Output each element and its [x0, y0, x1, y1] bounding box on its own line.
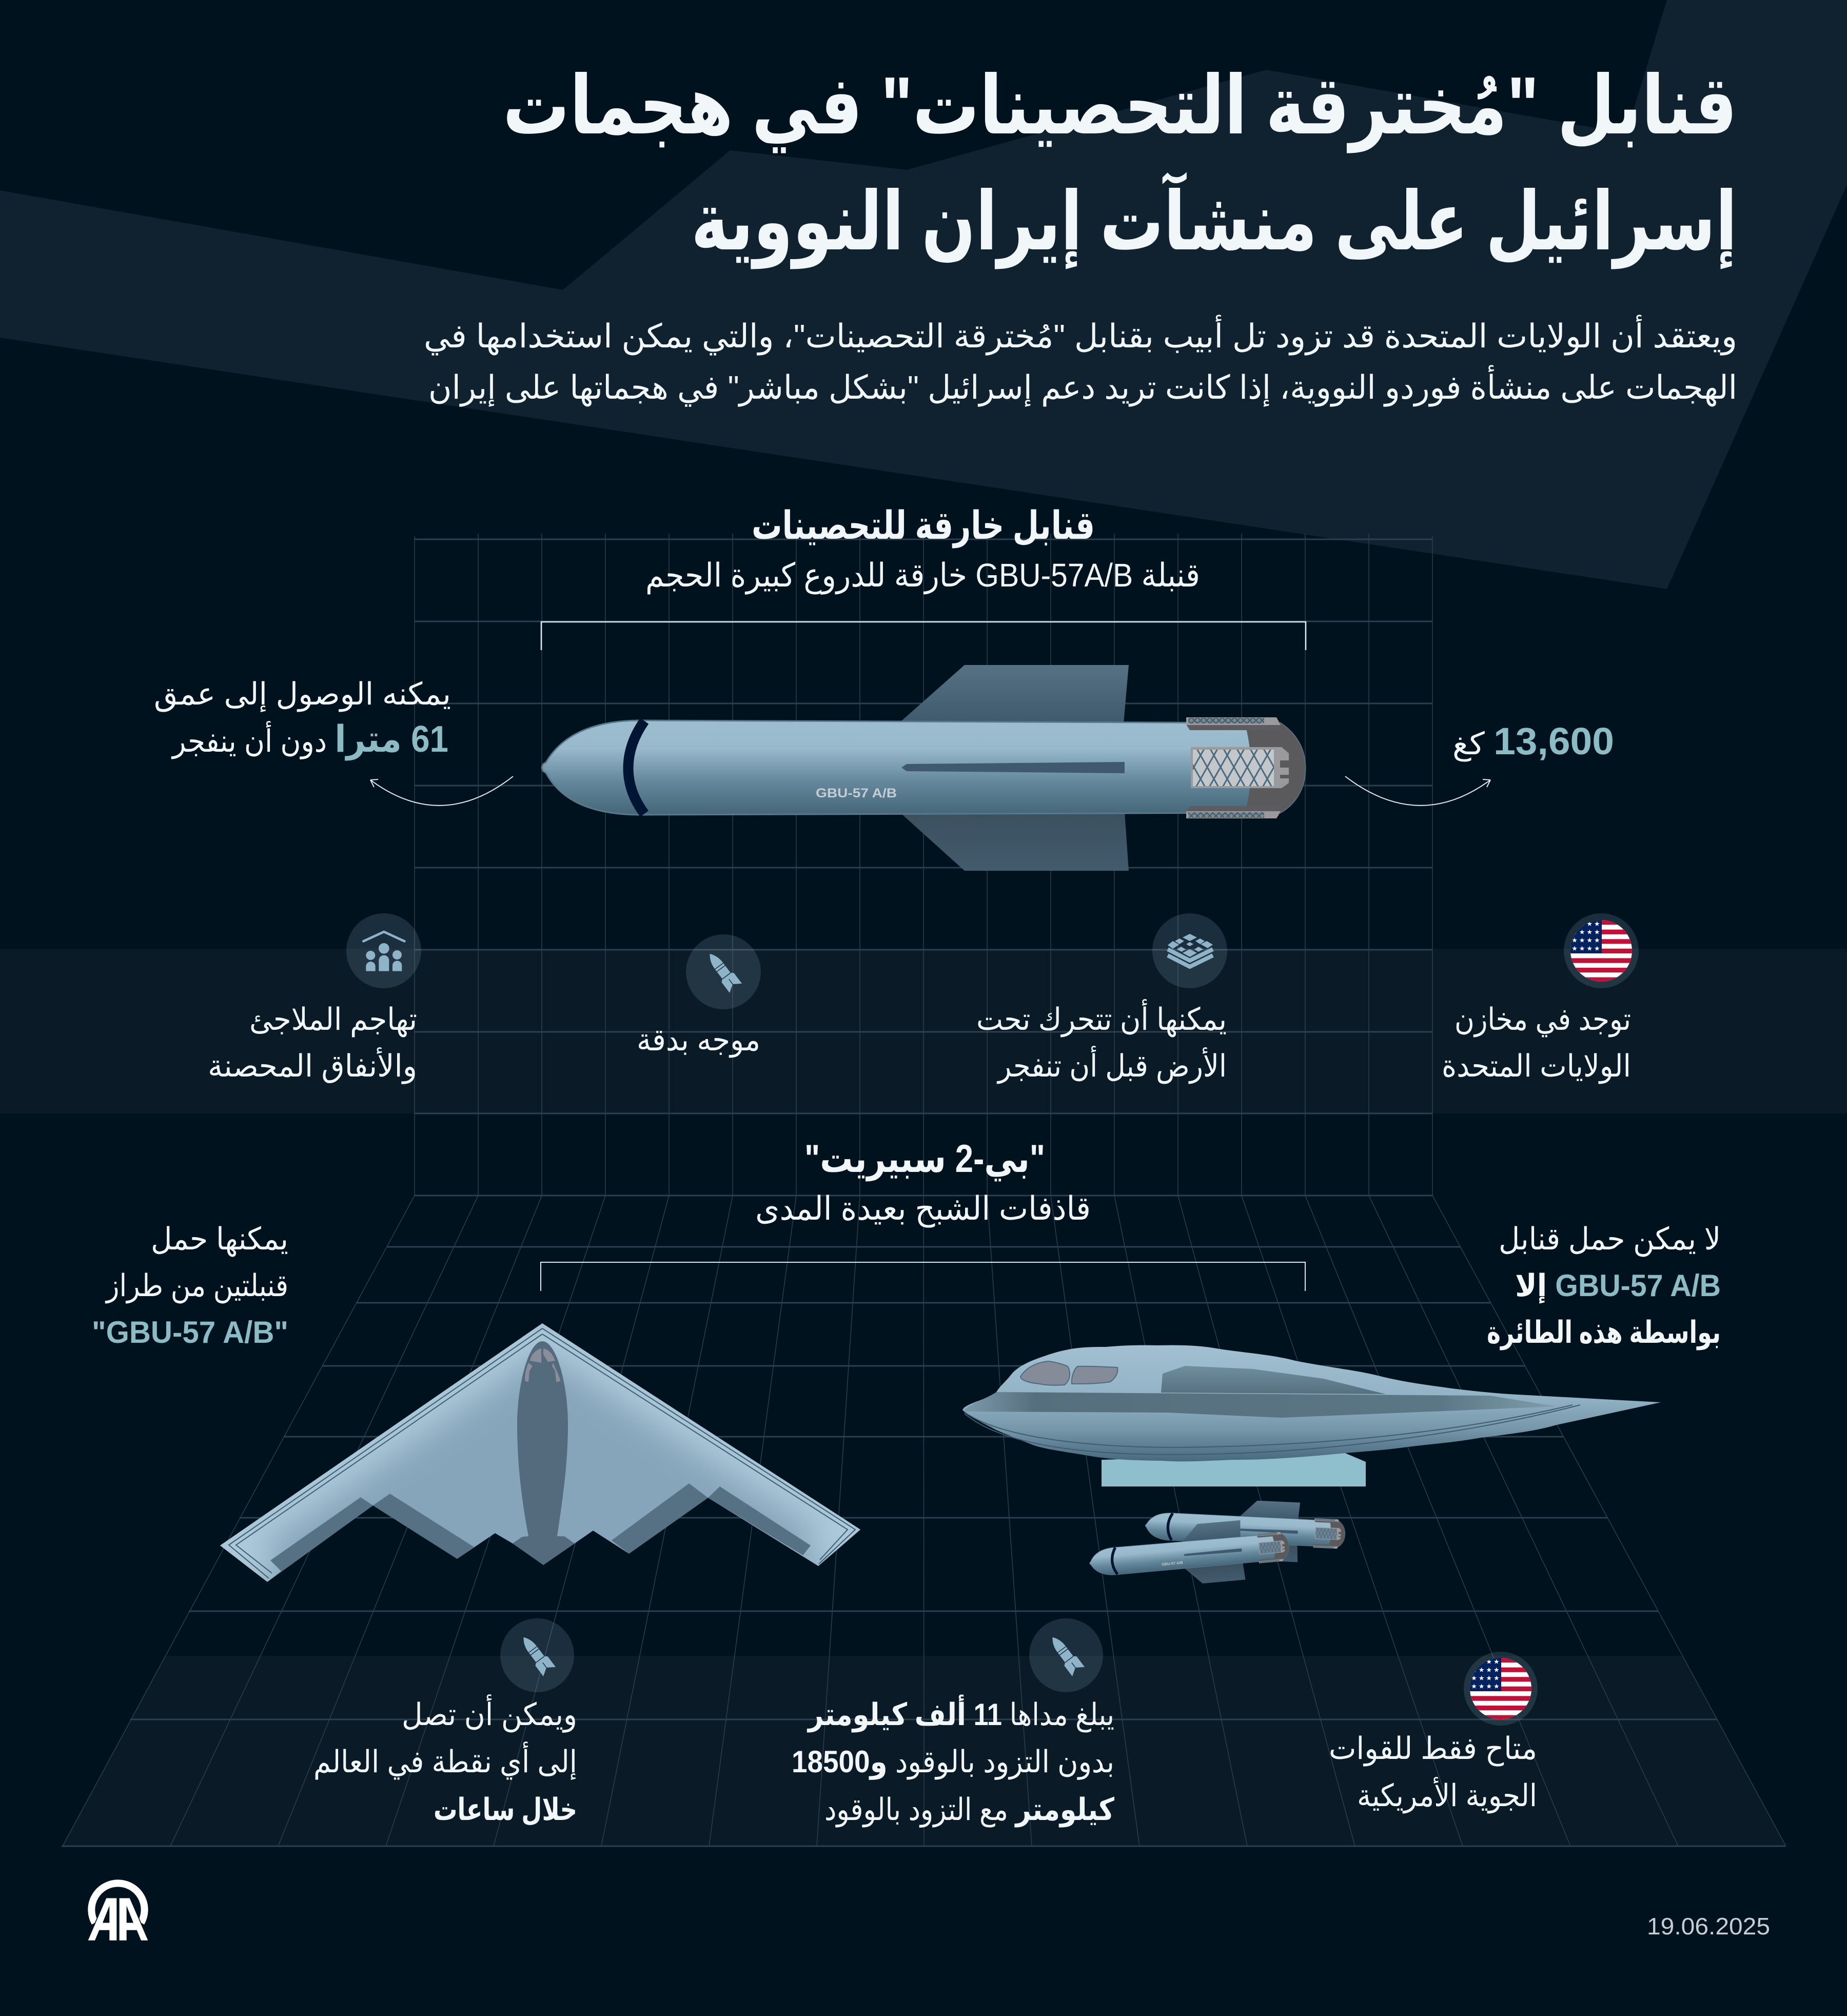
- logo: AA: [88, 1883, 148, 1941]
- text: US stockpiles: توجد في مخازن: [1455, 1002, 1631, 1038]
- arrow: depth: [370, 776, 513, 806]
- GBU-57 bomb illustration: GBU-57 A/B: [816, 786, 897, 800]
- intro paragraph: [424, 315, 1737, 407]
- B-2 side view: [962, 1345, 1661, 1486]
- text: range: [792, 1694, 1114, 1828]
- text: moves underground: [976, 999, 1227, 1084]
- heading: bunker busters: قنبلة GBU-57A/B خارقة للدروع كبيرة الحجم: [645, 557, 1200, 595]
- light horizontal band: floor: [63, 1656, 1786, 1846]
- title: [503, 61, 1737, 269]
- text: attacks shelters: تهاجم الملاجئ: [249, 1002, 417, 1038]
- date: 19.06.2025: [1647, 1913, 1770, 1940]
- weight callout: 13,600 كغ: [1452, 720, 1614, 762]
- small bomb front: [1087, 1516, 1291, 1593]
- text: US air force only: [1329, 1731, 1537, 1814]
- text: range: يبلغ مداها 11 ألف كيلومتر: [807, 1694, 1114, 1733]
- heading: B-2 Spirit: "بي-2 سبيريت": [804, 1137, 1045, 1182]
- depth callout: [154, 677, 451, 761]
- text: precision guided: موجه بدقة: [637, 1023, 760, 1058]
- small bomb rear: [1144, 1496, 1346, 1564]
- icon: bomb range: [1029, 1618, 1103, 1692]
- icon: US flag: [1564, 913, 1639, 988]
- text: carries two bombs: يمكنها حمل: [151, 1222, 288, 1257]
- icon: US flag air force: [1464, 1652, 1538, 1726]
- text: US air force only: متاح فقط للقوات: [1329, 1731, 1537, 1767]
- text: US stockpiles: الولايات المتحدة: [1442, 1049, 1631, 1084]
- text: reach any point: خلال ساعات: [434, 1792, 577, 1827]
- depth callout: يمكنه الوصول إلى عمق: [154, 677, 451, 712]
- icon: bomb reach: [500, 1618, 574, 1692]
- text: US air force only: الجوية الأمريكية: [1357, 1777, 1537, 1814]
- text: carries two bombs: قنبلتين من طراز: [105, 1268, 288, 1304]
- GBU-57 bomb illustration: [542, 665, 1305, 871]
- heading: B-2 Spirit: قاذفات الشبح بعيدة المدى: [755, 1190, 1091, 1228]
- text: attacks shelters: [208, 1002, 417, 1084]
- text: US stockpiles: [1442, 1002, 1631, 1084]
- text: moves underground: يمكنها أن تتحرك تحت: [976, 999, 1227, 1038]
- light horizontal band: wall: [0, 949, 1847, 1113]
- background light polygon: [0, 0, 1847, 589]
- text: carries two bombs: "GBU-57 A/B": [92, 1315, 288, 1349]
- text: only carrier: بواسطة هذه الطائرة: [1487, 1315, 1721, 1350]
- text: carries two bombs: [92, 1222, 288, 1349]
- intro paragraph: ويعتقد أن الولايات المتحدة قد تزود تل أبيب بقنابل "مُخترقة التحصينات"، والتي يمكن استخدامها في: [424, 315, 1737, 356]
- bracket: B-2: [541, 1262, 1305, 1291]
- bomb pair: [1087, 1496, 1346, 1593]
- text: moves underground: الأرض قبل أن تنفجر: [996, 1046, 1227, 1084]
- text: attacks shelters: والأنفاق المحصنة: [208, 1047, 417, 1084]
- heading: bunker busters: قنابل خارقة للتحصينات: [752, 504, 1095, 549]
- text: only carrier: GBU-57 A/B إلا: [1515, 1268, 1721, 1304]
- icon: ground layers: [1152, 913, 1227, 988]
- bracket: bomb length: [541, 622, 1306, 650]
- text: range: كيلومتر مع التزود بالوقود: [824, 1792, 1114, 1828]
- fuselage: [962, 1345, 1661, 1461]
- text: only carrier: [1487, 1222, 1721, 1350]
- heading: B-2 Spirit: [755, 1137, 1091, 1228]
- B-2 top view: [220, 1323, 860, 1582]
- text: only carrier: لا يمكن حمل قنابل: [1499, 1222, 1721, 1257]
- icon: guided bomb: [686, 934, 761, 1009]
- small bomb front: GBU-57 A/B: [1162, 1561, 1183, 1567]
- text: reach any point: إلى أي نقطة في العالم: [313, 1741, 577, 1780]
- text: range: بدون التزود بالوقود و18500: [792, 1745, 1114, 1780]
- depth callout: 61 مترا دون أن ينفجر: [171, 719, 448, 761]
- icon: shelter: [346, 913, 421, 988]
- perspective grid: [62, 534, 1786, 1846]
- intro paragraph: الهجمات على منشأة فوردو النووية، إذا كانت تريد دعم إسرائيل "بشكل مباشر" في هجماتها على إيران: [428, 365, 1737, 407]
- text: reach any point: [313, 1694, 577, 1827]
- text: reach any point: ويمكن أن تصل: [402, 1694, 577, 1733]
- arrow: weight: [1345, 776, 1490, 806]
- heading: bunker busters: [645, 504, 1200, 595]
- pedestal: [1102, 1453, 1366, 1486]
